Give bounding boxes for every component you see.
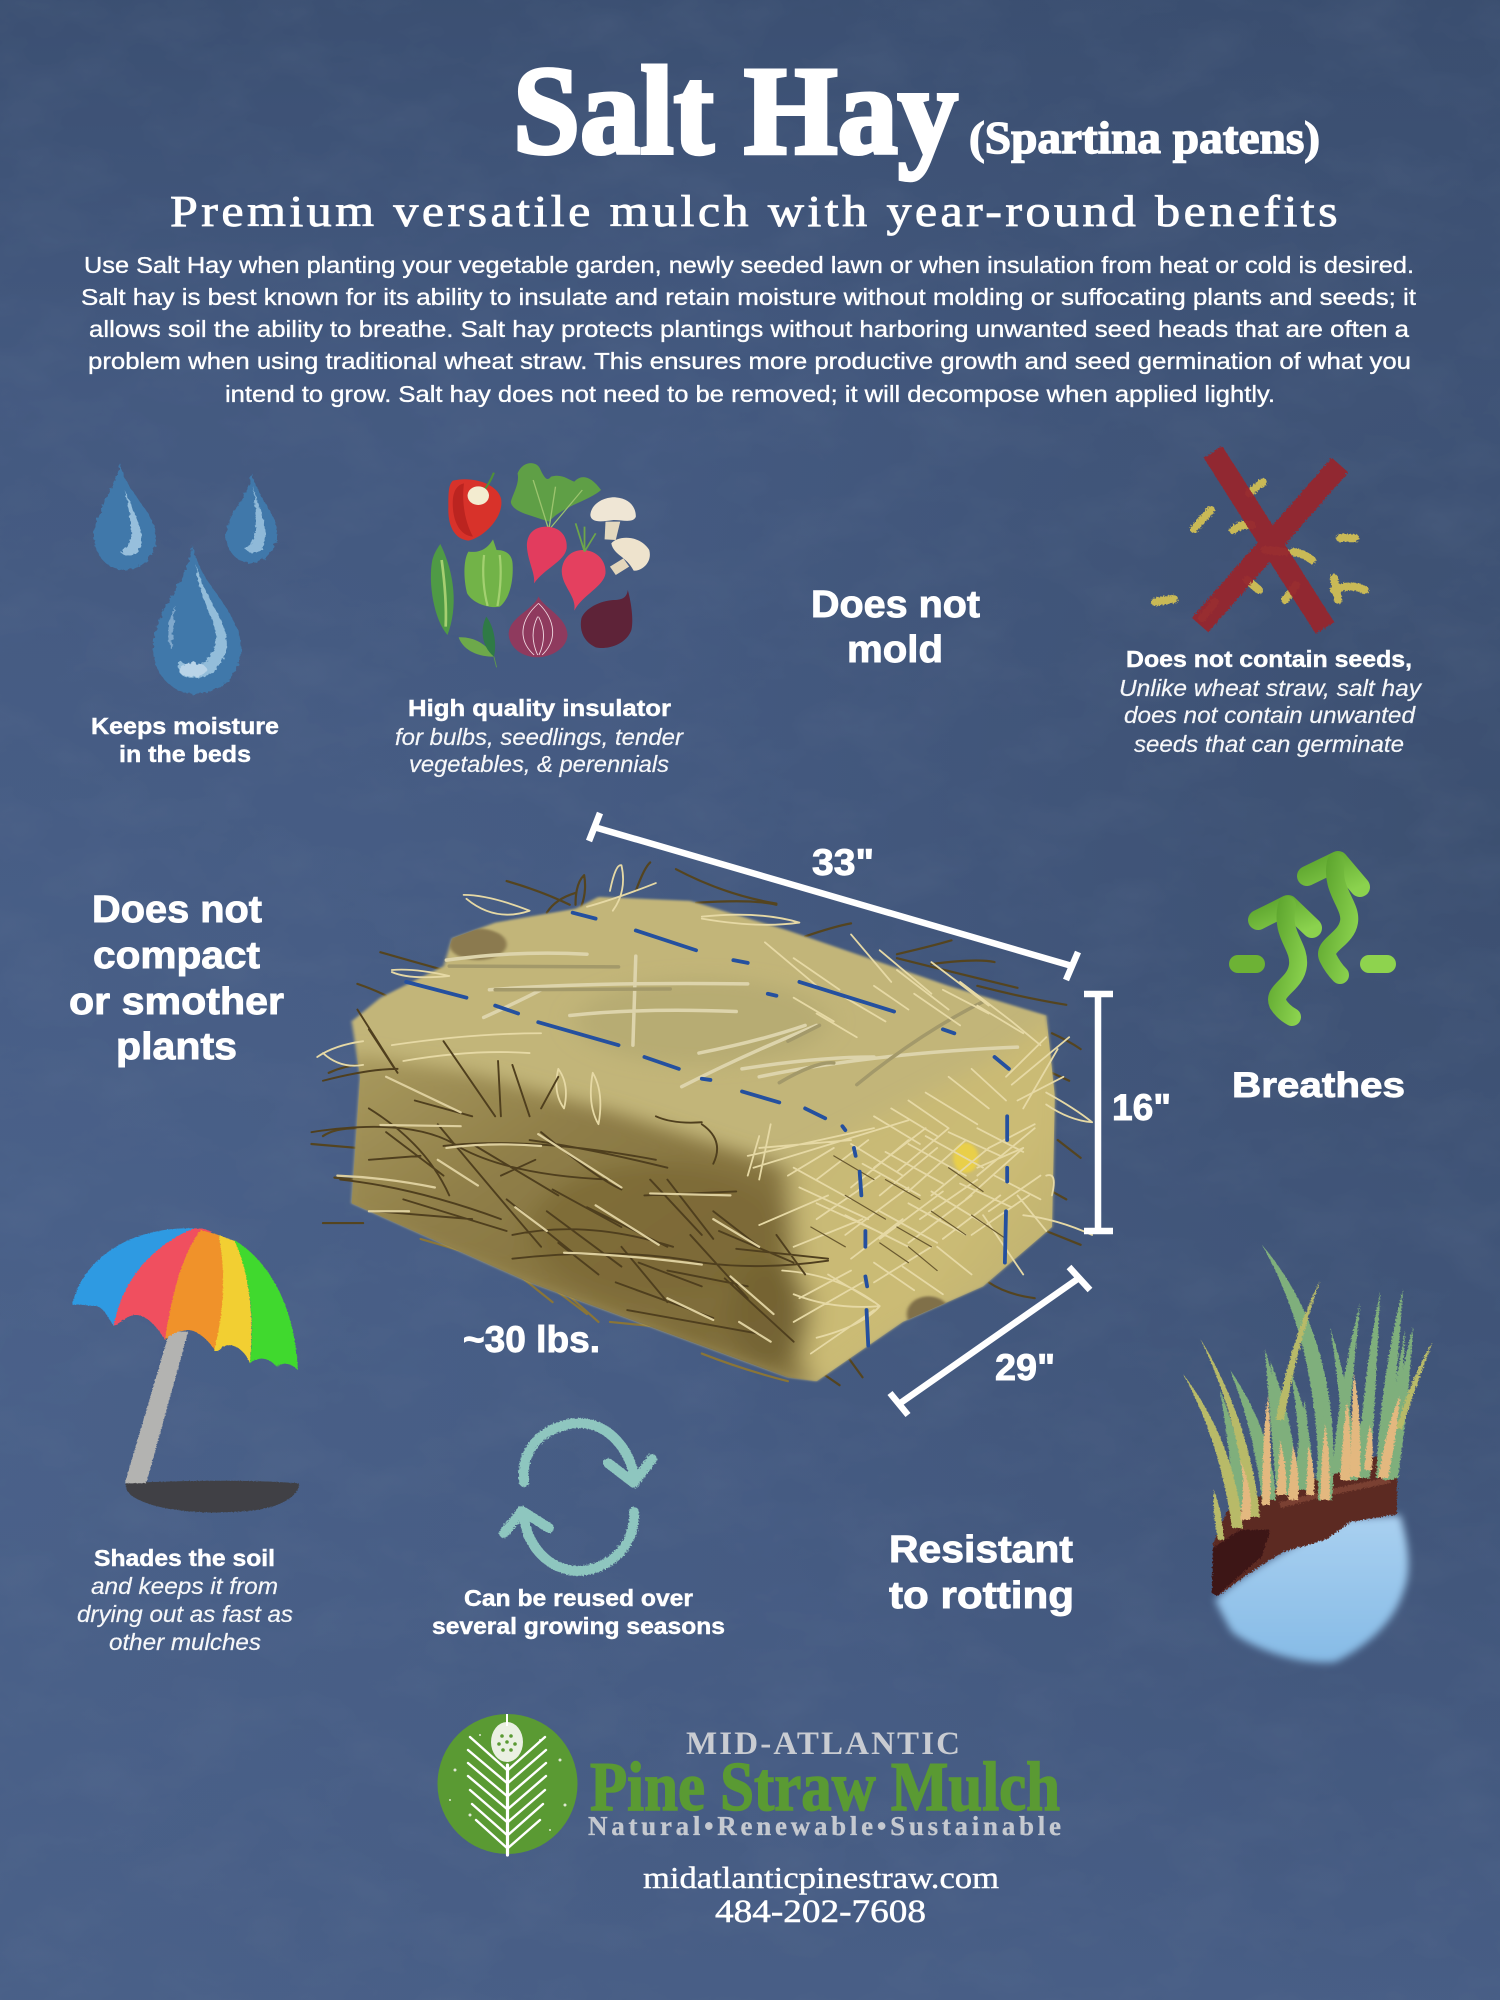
outer dark straws [311,862,1081,1385]
title [513,42,1320,181]
caption: shades the soil: drying out as fast as [77,1601,294,1627]
caption: high quality insulator: for bulbs, seedlings, tender [395,724,684,750]
panel: keeps moisture [91,463,279,767]
dimension: 16 inches [1084,994,1171,1231]
intro text block: problem when using traditional wheat straw. This ensures more productive growth and seed germination of what you [88,348,1411,374]
panel: shades the soil [72,1228,299,1655]
logo wordmark [588,1726,1061,1841]
caption: high quality insulator: vegetables, & perennials [409,751,670,777]
panel: high quality insulator [395,463,684,777]
bale body [352,897,1055,1381]
caption: does not contain seeds: seeds that can germinate [1134,731,1404,757]
grass blades [1183,1245,1433,1540]
caption: shades the soil: and keeps it from [91,1573,278,1599]
callout: does not compact [69,889,284,1068]
light straws [317,865,1092,1354]
title: Salt Hay [513,42,958,181]
caption: shades the soil: other mulches [109,1629,262,1655]
callout: does not compact: plants [116,1026,237,1068]
dimension: 33 inches [589,813,1078,980]
caption: reusable: several growing seasons [432,1613,725,1639]
caption: keeps moisture [91,713,279,767]
callout: does not mold: Does not [811,584,980,626]
panel: does not contain seeds [1119,452,1423,757]
contact details [643,1860,999,1930]
twine [406,913,1009,1346]
contact details: 484-202-7608 [715,1894,926,1930]
panel: breathes [1232,861,1405,1105]
caption: does not contain seeds: does not contain unwanted [1124,702,1416,728]
callout: does not mold [811,584,980,671]
subtitle: Premium versatile mulch with year-round benefits [170,187,1341,236]
dark straws on left face [311,1010,1006,1342]
caption: does not contain seeds: Unlike wheat straw, salt hay [1119,675,1423,701]
icon: crossed out seeds [1155,452,1365,628]
caption: high quality insulator: High quality insulator [408,695,671,721]
intro text block: intend to grow. Salt hay does not need to be removed; it will decompose when applied lightly. [225,381,1275,407]
icon: umbrella [72,1228,299,1513]
water [1215,1515,1408,1662]
logo wordmark: MID-ATLANTIC [686,1726,964,1762]
callout: does not compact: or smother [69,981,284,1023]
caption: reusable [432,1585,725,1639]
title: (Spartina patens) [969,112,1320,163]
panel: reusable [432,1423,725,1639]
intro text block: Use Salt Hay when planting your vegetable garden, newly seeded lawn or when insulation from heat or cold is desired. [84,252,1414,278]
callout: does not compact: Does not [92,889,262,931]
intro text block: Salt hay is best known for its ability to insulate and retain moisture without molding or suffocating plants and seeds; it [81,284,1417,310]
icon: vegetables [431,463,650,667]
dimension: 16 inches: 16" [1112,1087,1171,1128]
caption: does not contain seeds: Does not contain seeds, [1126,646,1412,672]
caption: shades the soil: Shades the soil [94,1545,275,1571]
contact details: midatlanticpinestraw.com [643,1860,999,1895]
soil [1212,1456,1397,1596]
icon: breathing arrows [1238,861,1387,1017]
pale thick strokes [446,953,1018,1087]
intro text block: allows soil the ability to breathe. Salt hay protects plantings without harboring unwanted seed heads that are often a [89,316,1409,342]
callout: resistant to rotting: Resistant [889,1529,1073,1571]
highlights on left face [337,1077,774,1342]
caption: reusable: Can be reused over [464,1585,693,1611]
logo wordmark: Natural•Renewable•Sustainable [588,1811,1061,1841]
caption: high quality insulator [395,695,684,777]
illustration: marsh grass with water [1183,1245,1433,1662]
callout: resistant to rotting [889,1529,1074,1617]
icon: cycle arrows [504,1423,652,1571]
callout: does not compact: compact [93,935,260,977]
logo [438,1714,1061,1855]
caption: does not contain seeds [1119,646,1423,757]
icon: water drops [94,463,277,694]
callout: resistant to rotting: to rotting [889,1575,1074,1617]
callout: does not mold: mold [847,629,943,671]
caption: shades the soil [77,1545,294,1655]
logo wordmark: Pine Straw Mulch [590,1749,1060,1826]
dimension: 29 inches: 29" [995,1347,1055,1388]
intro text block [81,252,1417,407]
caption: breathes: Breathes [1232,1066,1405,1105]
icon: pine emblem [438,1714,578,1855]
weight label: ~30 lbs. [463,1319,600,1360]
dimension: 33 inches: 33" [812,842,874,883]
dimension: 29 inches [890,1267,1090,1415]
caption: keeps moisture: in the beds [119,741,251,767]
illustration: hay bale [311,862,1092,1389]
caption: keeps moisture: Keeps moisture [91,713,279,739]
